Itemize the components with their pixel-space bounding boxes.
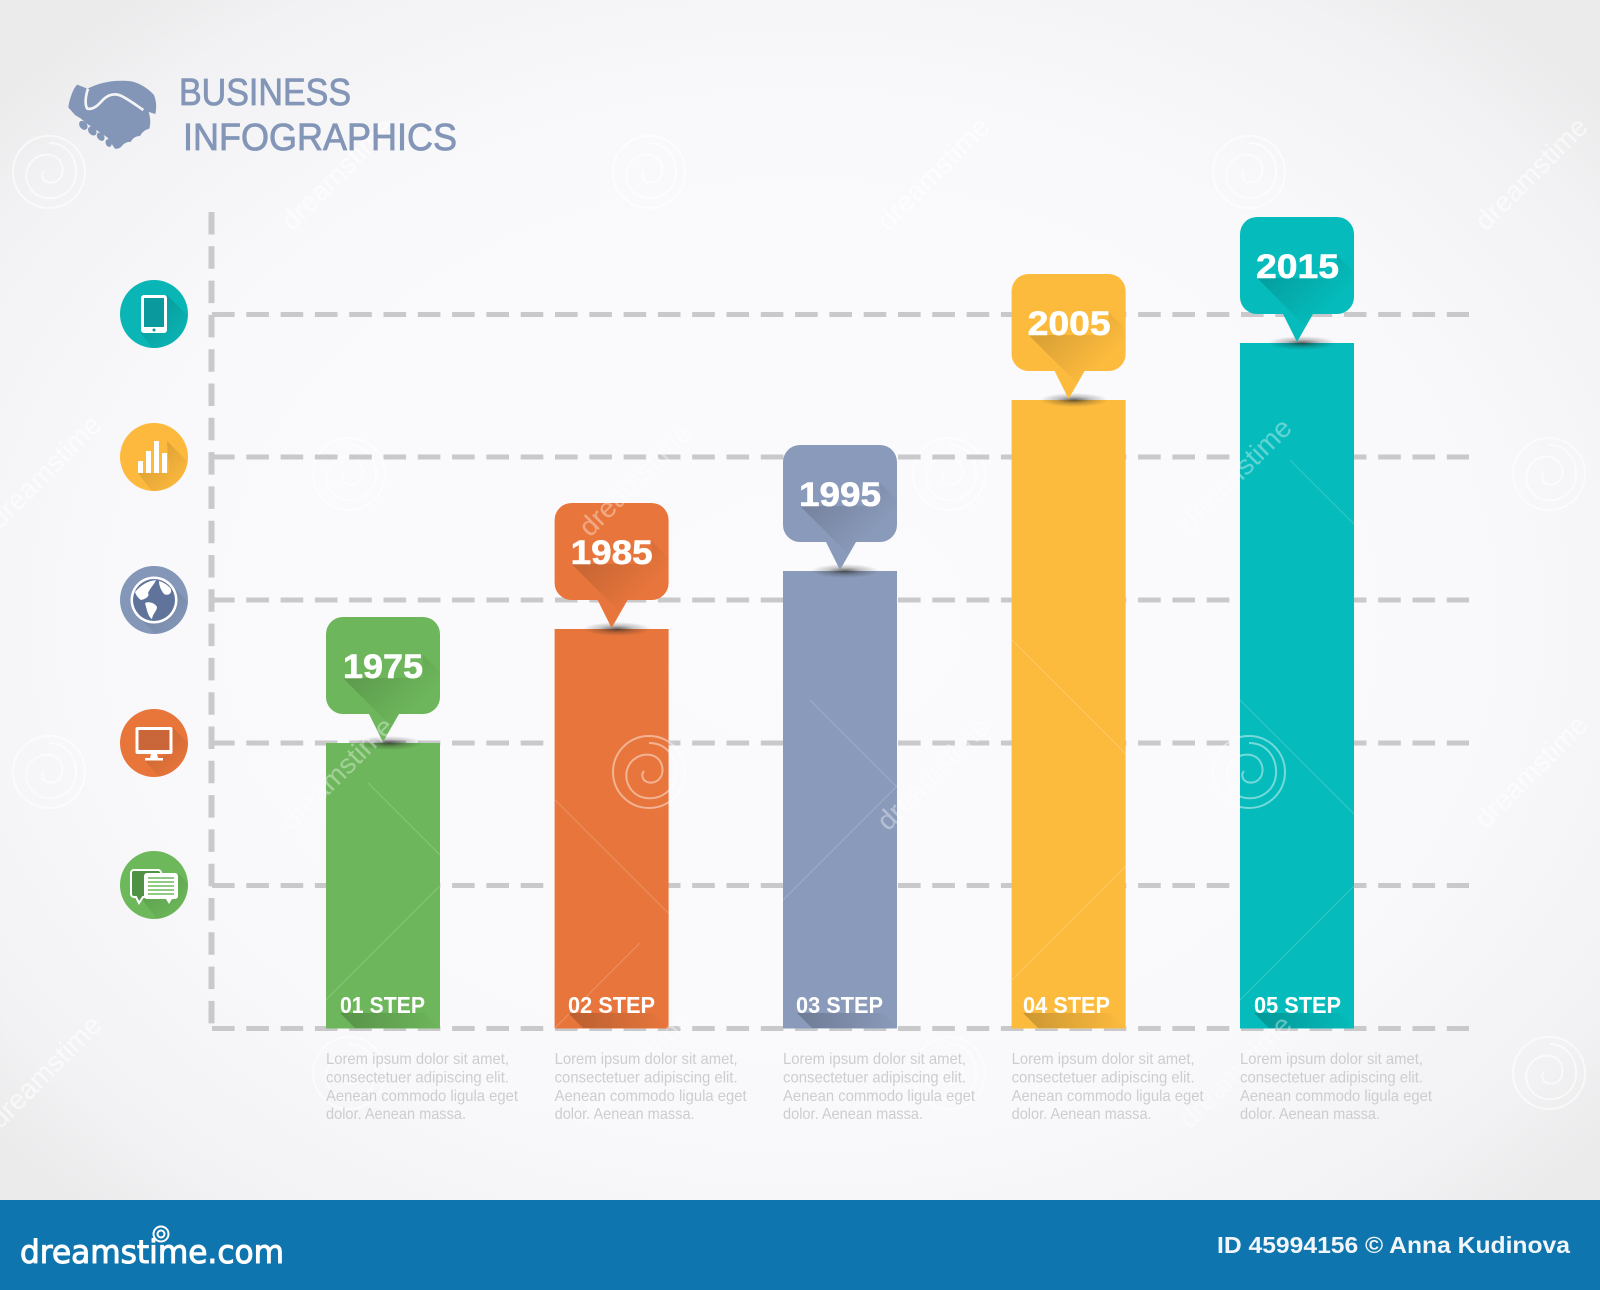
text: dreamstime — [1172, 1009, 1298, 1134]
text block: step 5 description: dolor. Aenean massa. — [1240, 1106, 1380, 1123]
text block: step 4 description: dolor. Aenean massa. — [1012, 1106, 1152, 1123]
text block: step 4 description: Aenean commodo ligula eget — [1012, 1088, 1204, 1105]
text block: step 4 description: Lorem ipsum dolor sit amet, — [1012, 1051, 1195, 1068]
text block: step 4 description: consectetuer adipiscing elit. — [1012, 1070, 1195, 1086]
text: dreamstime — [572, 1004, 698, 1129]
text block: step 1 description: dolor. Aenean massa. — [326, 1106, 466, 1123]
step label: 01 STEP — [340, 992, 440, 1028]
footer logo: dreamstime.com: dreamstime.com — [20, 1233, 284, 1271]
icon: speech bubbles — [120, 851, 188, 919]
text: dreamstime — [870, 711, 996, 836]
text: dreamstime — [274, 111, 400, 236]
text: dreamstime — [572, 417, 698, 542]
step label: 05 STEP: 05 STEP — [1254, 992, 1341, 1018]
icon: handshake — [68, 81, 156, 149]
pin: 1985 — [554, 503, 669, 628]
bar: 2015 — [1240, 217, 1354, 1028]
bar: 2005 — [1012, 274, 1126, 1028]
step label: 04 STEP — [1023, 992, 1126, 1028]
title: INFOGRAPHICS — [183, 117, 457, 159]
step label: 03 STEP: 03 STEP — [796, 992, 883, 1018]
text: dreamstime — [870, 111, 996, 236]
text block: step 2 description: consectetuer adipiscing elit. — [555, 1070, 738, 1086]
bar: 1985 — [554, 503, 669, 1028]
text block: step 2 description — [555, 1051, 747, 1123]
text block: step 4 description — [1012, 1051, 1204, 1123]
text block: step 5 description: Lorem ipsum dolor sit amet, — [1240, 1051, 1423, 1068]
title: BUSINESS — [179, 72, 351, 114]
text block: step 3 description: Lorem ipsum dolor sit amet, — [783, 1051, 966, 1068]
text block: step 3 description: dolor. Aenean massa. — [783, 1106, 923, 1123]
pin: 1975 — [326, 617, 440, 742]
step label: 01 STEP: 01 STEP — [340, 992, 425, 1018]
text: dreamstime — [1468, 709, 1594, 834]
text: dreamstime — [274, 711, 400, 836]
text block: step 5 description: Aenean commodo ligula eget — [1240, 1088, 1433, 1105]
text block: step 5 description: consectetuer adipiscing elit. — [1240, 1070, 1423, 1086]
step label: 02 STEP: 02 STEP — [568, 992, 655, 1018]
icon: bar chart — [120, 423, 188, 491]
text block: step 3 description: Aenean commodo ligula eget — [783, 1088, 976, 1105]
step label: 04 STEP: 04 STEP — [1023, 992, 1110, 1018]
step label: 05 STEP — [1254, 992, 1354, 1028]
text block: step 2 description: dolor. Aenean massa. — [555, 1106, 695, 1123]
pin: 2005: 2005 — [1028, 305, 1111, 343]
text: dreamstime — [1468, 111, 1594, 236]
bar: 1975 — [326, 617, 440, 1028]
footer credit: ID 45994156 © Anna Kudinova — [1217, 1232, 1570, 1258]
icon: monitor — [120, 709, 188, 777]
pin: 1995: 1995 — [799, 476, 881, 514]
pin: 2015 — [1240, 217, 1354, 342]
step label: 02 STEP — [568, 992, 669, 1028]
pin: 1985: 1985 — [571, 534, 653, 572]
icon: tablet — [120, 280, 188, 348]
pin: 2015: 2015 — [1256, 248, 1339, 286]
text block: step 2 description: Aenean commodo ligula eget — [555, 1088, 747, 1105]
text block: step 2 description: Lorem ipsum dolor sit amet, — [555, 1051, 738, 1068]
text block: step 3 description — [783, 1051, 976, 1123]
chart grid: dashed axes — [212, 212, 1469, 1029]
text block: step 5 description — [1240, 1051, 1433, 1123]
text block: step 1 description: Lorem ipsum dolor sit amet, — [326, 1051, 509, 1068]
pin: 1995 — [783, 445, 897, 570]
text: dreamstime — [1172, 412, 1298, 537]
text block: step 1 description: Aenean commodo ligula eget — [326, 1088, 519, 1105]
pin: 1975: 1975 — [343, 648, 423, 686]
pin: 2005 — [1012, 274, 1126, 399]
bar: 1995 — [783, 445, 897, 1028]
icon: globe — [120, 566, 188, 634]
step label: 03 STEP — [796, 992, 897, 1028]
text block: step 1 description — [326, 1051, 519, 1123]
footer bar — [0, 1200, 1600, 1290]
text block: step 3 description: consectetuer adipiscing elit. — [783, 1070, 966, 1086]
text block: step 1 description: consectetuer adipiscing elit. — [326, 1070, 509, 1086]
title — [179, 72, 457, 159]
